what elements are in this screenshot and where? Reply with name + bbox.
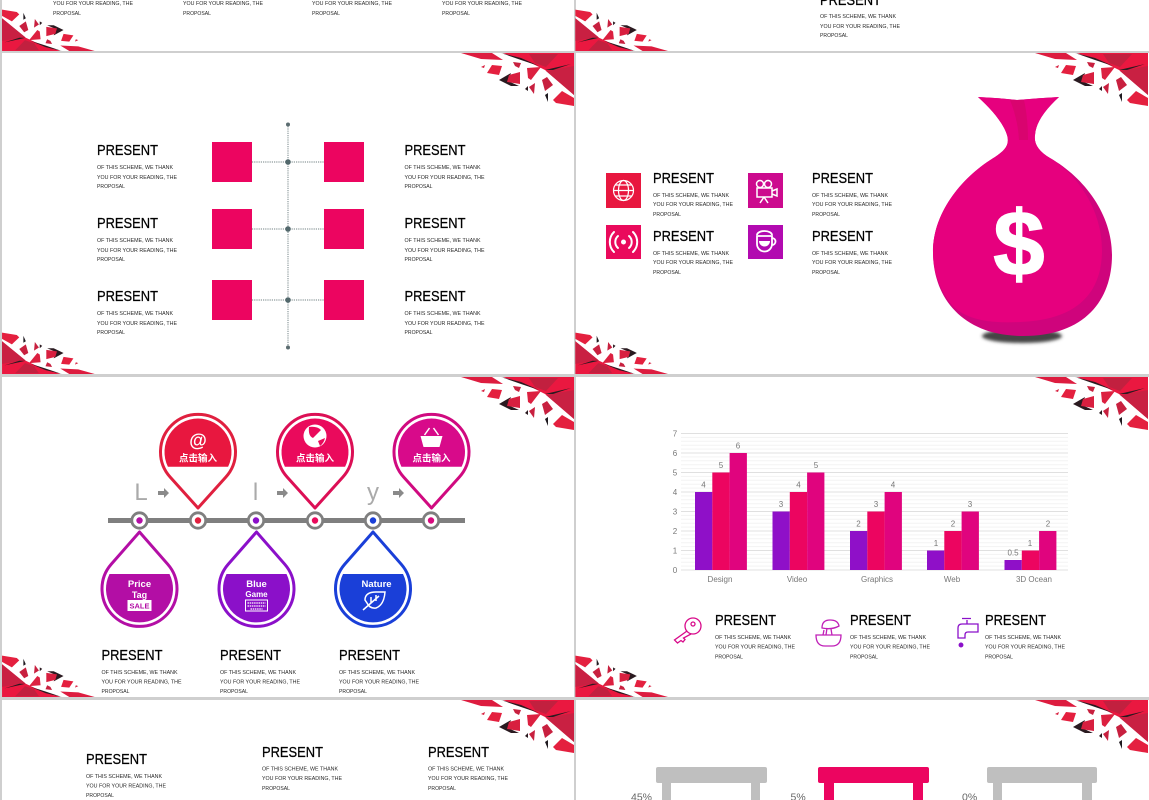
y axis labels: [673, 430, 678, 575]
text block: column 3: OF THIS SCHEME, WE THANK: [339, 670, 415, 676]
text block: bottom left: PROPOSAL: [653, 270, 681, 276]
text block: column 2: YOU FOR YOUR READING, THE: [262, 776, 342, 782]
text block: top left: [653, 171, 733, 218]
text block: column 3: PRESENT: [339, 648, 400, 664]
text block: present: OF THIS SCHEME, WE THANK: [820, 14, 896, 20]
decoration: top right polygon corner: [461, 53, 574, 106]
text block: bowl: YOU FOR YOUR READING, THE: [850, 644, 930, 650]
arrows between letters: [158, 488, 404, 498]
pin: blue game keyboard: [219, 532, 294, 626]
pin: at sign: 点击输入: [179, 452, 217, 464]
panel: LIy pin timeline slide: [2, 377, 574, 697]
text block: key: [715, 613, 795, 660]
value labels: 6: [736, 442, 741, 450]
decoration: bottom left polygon corner: [2, 333, 95, 374]
text block: right 3: PROPOSAL: [404, 330, 432, 336]
pin: price tag: SALE: [129, 602, 150, 610]
panel: tables slide: [576, 700, 1149, 800]
text block: key: YOU FOR YOUR READING, THE: [715, 644, 795, 650]
pin: nature leaf: [336, 532, 410, 626]
letters: L I y: l: [253, 479, 258, 506]
y axis labels: 1: [673, 546, 678, 556]
y axis labels: 4: [673, 488, 678, 497]
icon: coffee cup: [748, 225, 783, 259]
text block: top left: PRESENT: [653, 171, 714, 187]
text block: right 2: OF THIS SCHEME, WE THANK: [404, 238, 481, 244]
text block: tap: OF THIS SCHEME, WE THANK: [985, 635, 1061, 641]
text block: column 4: [442, 1, 522, 17]
text block: right 3: OF THIS SCHEME, WE THANK: [404, 311, 481, 317]
text block: column 3: [312, 1, 392, 17]
text block: column 3: PROPOSAL: [339, 689, 367, 695]
text block: top left: YOU FOR YOUR READING, THE: [653, 202, 733, 208]
category labels: Graphics: [861, 575, 893, 584]
text block: column 3: PROPOSAL: [312, 11, 340, 17]
decoration: top right polygon corner: [1035, 377, 1148, 430]
text block: left 2: YOU FOR YOUR READING, THE: [97, 248, 177, 254]
text block: column 2: OF THIS SCHEME, WE THANK: [262, 766, 338, 772]
letters: L I y: [134, 479, 379, 506]
text block: left 3: PRESENT: [97, 289, 158, 305]
text block: bowl: PRESENT: [850, 613, 911, 629]
icon: video camera: [748, 173, 783, 208]
percent labels: [631, 792, 977, 800]
text block: left 1: PROPOSAL: [97, 184, 125, 190]
category labels: 3D Ocean: [1016, 575, 1052, 584]
text block: bottom right: YOU FOR YOUR READING, THE: [812, 260, 892, 266]
value labels: 3: [779, 500, 784, 509]
decoration: top right polygon corner: [461, 377, 574, 430]
letters: L I y: L: [134, 479, 148, 506]
text block: right 1: YOU FOR YOUR READING, THE: [404, 175, 485, 181]
text block: column 2: [262, 745, 342, 792]
text block: column 3: PROPOSAL: [428, 786, 456, 792]
value labels: 4: [891, 480, 896, 490]
text block: top left: OF THIS SCHEME, WE THANK: [653, 193, 729, 199]
text block: right 2: YOU FOR YOUR READING, THE: [404, 248, 485, 254]
pin: blue game keyboard: Blue: [246, 579, 267, 590]
text block: right 3: YOU FOR YOUR READING, THE: [404, 321, 485, 327]
text block: right 1: OF THIS SCHEME, WE THANK: [404, 165, 481, 171]
text block: tap: PROPOSAL: [985, 654, 1013, 660]
text block: bowl: PROPOSAL: [850, 654, 878, 660]
text block: tap: [985, 613, 1065, 660]
text block: column 2: [220, 648, 300, 695]
text block: left 1: OF THIS SCHEME, WE THANK: [97, 165, 173, 171]
panel: squares timeline slide: [2, 53, 574, 374]
y axis labels: 0: [673, 566, 678, 575]
text block: right 1: PROPOSAL: [404, 184, 432, 190]
decoration: bottom left polygon corner: [2, 656, 95, 697]
text block: bottom left: OF THIS SCHEME, WE THANK: [653, 251, 729, 257]
bar chart: [673, 430, 1068, 584]
value labels: 0.5: [1007, 548, 1019, 558]
value labels: [701, 442, 1051, 558]
value labels: 2: [856, 520, 861, 528]
timeline bar with nodes: [108, 513, 465, 528]
value labels: 1: [1028, 539, 1033, 548]
text block: top right: PRESENT: [812, 171, 873, 187]
text block: present: [820, 0, 900, 39]
text block: column 1: [86, 752, 166, 799]
text block: bottom left: [653, 229, 733, 276]
value labels: 5: [814, 461, 819, 470]
text block: right 3: PRESENT: [404, 289, 466, 305]
text block: right 2: PRESENT: [404, 216, 466, 232]
text block: present: PROPOSAL: [820, 33, 848, 39]
text block: column 1: [102, 648, 182, 695]
text block: present: YOU FOR YOUR READING, THE: [820, 24, 900, 30]
text block: column 2: YOU FOR YOUR READING, THE: [183, 1, 263, 7]
panel: top right slide: [575, 0, 1149, 51]
decoration: bottom left polygon corner: [575, 656, 668, 697]
pin: globe: 点击输入: [296, 452, 334, 464]
text block: key: OF THIS SCHEME, WE THANK: [715, 635, 791, 641]
text block: column 3: YOU FOR YOUR READING, THE: [339, 680, 419, 686]
pin: nature leaf: Nature: [361, 579, 392, 590]
text block: top right: PROPOSAL: [812, 212, 840, 218]
value labels: 2: [1046, 520, 1051, 528]
icon: globe: [606, 173, 641, 208]
text block: bowl: OF THIS SCHEME, WE THANK: [850, 635, 926, 641]
table: pink middle: [818, 767, 929, 800]
text block: column 3: [339, 648, 419, 695]
text block: column 3: YOU FOR YOUR READING, THE: [312, 1, 392, 7]
category labels: Web: [944, 575, 961, 584]
table: gray left: [656, 767, 767, 800]
pin: price tag: Tag: [132, 590, 147, 600]
text block: column 1: PROPOSAL: [53, 11, 81, 17]
icon: money bag: $: [993, 193, 1045, 295]
text block: column 3: YOU FOR YOUR READING, THE: [428, 776, 508, 782]
text block: bottom left: PRESENT: [653, 229, 714, 245]
bars: red series: [712, 472, 1039, 570]
text block: column 4: YOU FOR YOUR READING, THE: [442, 1, 522, 7]
icon: key: [674, 618, 701, 643]
category labels: Video: [787, 575, 808, 584]
vertical dotted timeline: [252, 122, 324, 350]
text block: column 2: PRESENT: [262, 745, 323, 761]
y axis labels: 5: [673, 468, 678, 478]
value labels: 5: [719, 461, 724, 470]
value labels: 4: [701, 480, 706, 490]
decoration: bottom left polygon corner: [575, 10, 668, 51]
category labels: [708, 575, 1052, 584]
text block: column 2: PROPOSAL: [183, 11, 211, 17]
text block: left 3: YOU FOR YOUR READING, THE: [97, 321, 177, 327]
icon: water tap: [958, 618, 978, 647]
text block: bottom left: YOU FOR YOUR READING, THE: [653, 260, 733, 266]
text block: column 1: YOU FOR YOUR READING, THE: [102, 680, 182, 686]
text block: column 2: PROPOSAL: [262, 786, 290, 792]
panel: money bag slide: [575, 53, 1149, 374]
value labels: 3: [968, 500, 973, 509]
text block: tap: PRESENT: [985, 613, 1046, 629]
text block: column 3: OF THIS SCHEME, WE THANK: [428, 766, 504, 772]
table: gray right: [987, 767, 1097, 800]
value labels: 1: [934, 539, 939, 548]
text block: left 1: YOU FOR YOUR READING, THE: [97, 175, 177, 181]
letters: L I y: y: [367, 479, 379, 506]
text block: top right: YOU FOR YOUR READING, THE: [812, 202, 892, 208]
text block: column 1: YOU FOR YOUR READING, THE: [86, 784, 166, 790]
text block: column 3: PRESENT: [428, 745, 489, 761]
text block: right 2: PROPOSAL: [404, 257, 432, 263]
text block: key: PRESENT: [715, 613, 776, 629]
panel: top left slide: [2, 0, 574, 51]
text block: column 2: OF THIS SCHEME, WE THANK: [220, 670, 296, 676]
text block: left 3: PROPOSAL: [97, 330, 125, 336]
decoration: top right polygon corner: [1035, 700, 1148, 753]
text block: column 2: PRESENT: [220, 648, 281, 664]
text block: column 4: PROPOSAL: [442, 11, 470, 17]
text block: bowl: [850, 613, 930, 660]
y axis labels: 7: [673, 430, 678, 438]
pin: basket: [394, 414, 469, 508]
text block: left 2: PROPOSAL: [97, 257, 125, 263]
text block: column 2: PROPOSAL: [220, 689, 248, 695]
bars: magenta series: [730, 453, 1056, 570]
value labels: 2: [951, 520, 956, 528]
text block: key: PROPOSAL: [715, 654, 743, 660]
text block: bottom right: PRESENT: [812, 229, 873, 245]
text block: right 1: [404, 143, 485, 190]
text block: column 3: [428, 745, 508, 792]
decoration: top right polygon corner: [461, 700, 574, 753]
text block: left 2: [97, 216, 177, 263]
pin: basket: 点击输入: [412, 452, 451, 464]
pin: price tag: Price: [128, 579, 151, 590]
text block: column 1: OF THIS SCHEME, WE THANK: [102, 670, 178, 676]
y axis labels: 6: [673, 449, 678, 458]
text block: bottom right: OF THIS SCHEME, WE THANK: [812, 251, 888, 257]
pin: globe: [278, 414, 352, 508]
value labels: 4: [796, 480, 801, 490]
y axis labels: 3: [673, 508, 678, 516]
text block: right 1: PRESENT: [404, 143, 466, 159]
category labels: Design: [708, 575, 732, 584]
text block: left 3: [97, 289, 177, 336]
text block: column 1: PROPOSAL: [86, 793, 114, 799]
icon: money bag: [933, 97, 1112, 343]
panel: bar chart slide: [575, 377, 1149, 697]
text block: left 1: [97, 143, 177, 190]
pin: price tag: [102, 532, 177, 626]
panel: bottom left slide: [2, 700, 574, 800]
text block: right 2: [404, 216, 485, 263]
text block: top left: PROPOSAL: [653, 212, 681, 218]
text block: tap: YOU FOR YOUR READING, THE: [985, 644, 1065, 650]
text block: column 1: PROPOSAL: [102, 689, 130, 695]
text block: bottom right: [812, 229, 892, 276]
icon: broadcast: [606, 225, 641, 259]
text block: left 1: PRESENT: [97, 143, 158, 159]
text block: column 2: YOU FOR YOUR READING, THE: [220, 680, 300, 686]
decoration: bottom left polygon corner: [2, 10, 95, 51]
text block: bottom right: PROPOSAL: [812, 270, 840, 276]
squares: six pink blocks: [212, 142, 364, 320]
pin: at sign: @: [189, 430, 207, 450]
text block: top right: [812, 171, 892, 218]
y axis labels: 2: [673, 527, 678, 536]
text block: left 3: OF THIS SCHEME, WE THANK: [97, 311, 173, 317]
text block: column 2: [183, 1, 263, 17]
bars: purple series: [695, 492, 1022, 570]
text block: column 1: OF THIS SCHEME, WE THANK: [86, 774, 162, 780]
text block: top right: OF THIS SCHEME, WE THANK: [812, 193, 888, 199]
pin: blue game keyboard: Game: [245, 590, 268, 599]
value labels: 3: [874, 500, 879, 509]
decoration: bottom left polygon corner: [575, 333, 668, 374]
text block: right 3: [404, 289, 485, 336]
text block: left 2: PRESENT: [97, 216, 158, 232]
icon: mushroom bowl: [816, 620, 841, 646]
text block: column 1: [53, 1, 133, 17]
text block: left 2: OF THIS SCHEME, WE THANK: [97, 238, 173, 244]
text block: column 1: YOU FOR YOUR READING, THE: [53, 1, 133, 7]
text block: column 1: PRESENT: [86, 752, 147, 768]
text block: column 1: PRESENT: [102, 648, 163, 664]
decoration: top right polygon corner: [1035, 53, 1148, 106]
pin: at sign: [160, 414, 236, 508]
